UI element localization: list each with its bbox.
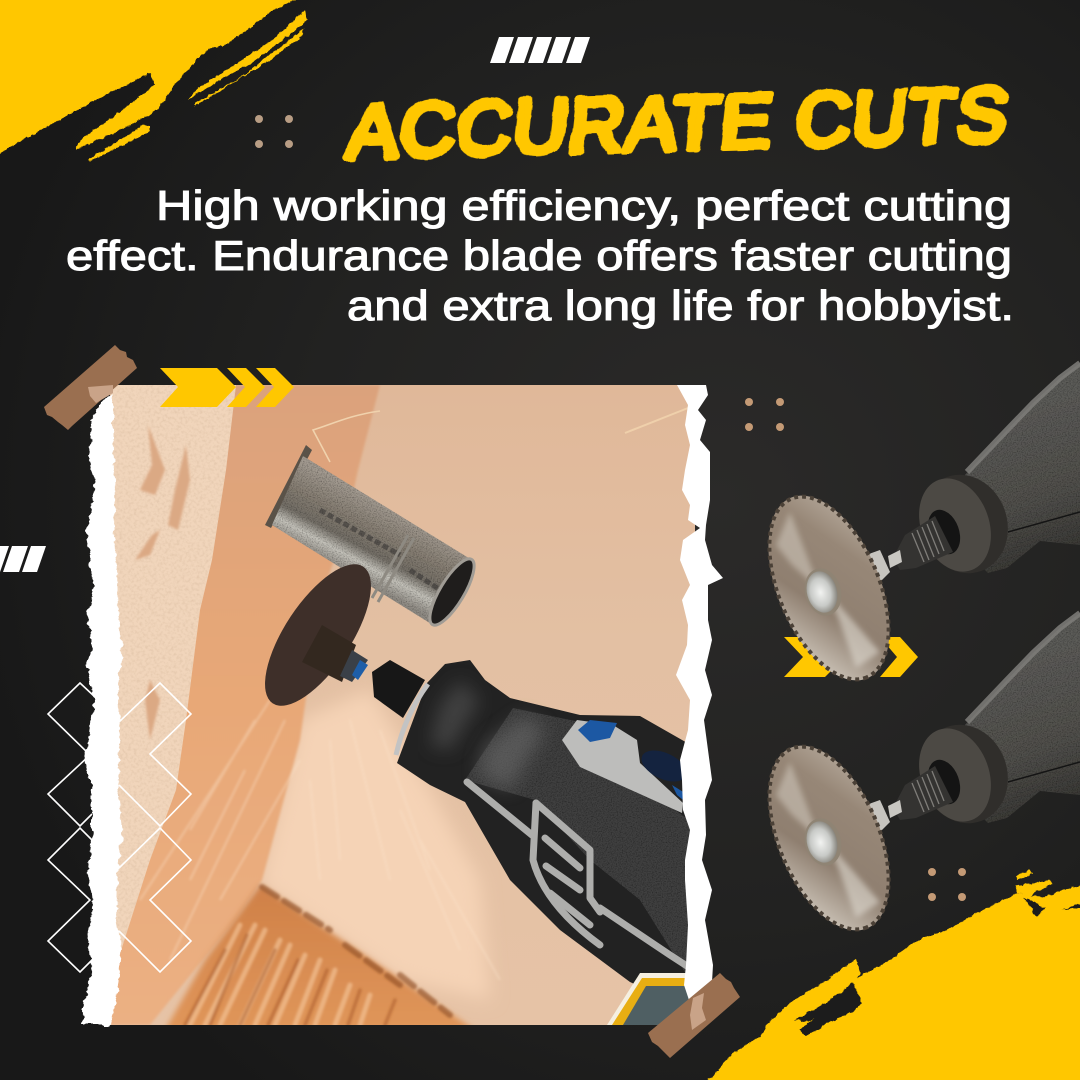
icon: cutting disc xyxy=(265,564,425,718)
decorative hatch bars: left xyxy=(0,546,46,572)
wood grain streaks xyxy=(185,887,450,1025)
icon: metal pipe xyxy=(265,445,482,631)
product: rotary tool with saw blade, bottom xyxy=(744,613,1080,948)
sparks: pale region xyxy=(260,690,490,1000)
tape: top left xyxy=(44,345,137,430)
collar highlight xyxy=(430,680,480,750)
torn paper: left edge xyxy=(82,392,122,1025)
wall: plaster xyxy=(110,385,236,960)
chevron arrows: over photo xyxy=(160,368,294,407)
wood grain band xyxy=(165,885,475,1030)
wall: wood face xyxy=(110,385,380,1025)
tape: bottom right xyxy=(648,973,740,1058)
silver button plate xyxy=(562,720,683,813)
plaster cracks xyxy=(135,425,190,740)
description text: effect. Endurance blade offers faster cutting xyxy=(66,232,1012,279)
dots: top left xyxy=(255,115,293,148)
description text: and extra long life for hobbyist. xyxy=(347,282,1014,329)
dark button xyxy=(642,750,682,782)
brush stroke: top left xyxy=(0,0,310,165)
product: rotary tool with saw blade, top xyxy=(744,363,1080,698)
blue button xyxy=(578,720,617,742)
collar and lower housing xyxy=(397,660,686,984)
dots: bottom right xyxy=(928,868,966,901)
brush stroke: bottom right xyxy=(700,870,1080,1080)
description text: High working efficiency, perfect cutting xyxy=(156,182,1012,229)
silver grille xyxy=(467,782,690,968)
yellow box corner xyxy=(607,973,688,1025)
decorative hatch bars: top xyxy=(490,37,590,63)
title: ACCURATE CUTS xyxy=(343,73,1013,175)
icon: rotary tool body xyxy=(396,660,696,1012)
photo: tool cutting pipe xyxy=(110,385,706,1030)
textured grip xyxy=(465,708,696,990)
diamond zigzag outline xyxy=(48,683,191,972)
description text xyxy=(66,182,1014,329)
spark streaks xyxy=(140,700,292,960)
grip highlight xyxy=(478,715,545,790)
chevron arrows: behind blade xyxy=(784,637,918,677)
dots: right xyxy=(745,398,784,431)
wood scratch xyxy=(313,411,380,462)
wall: beige xyxy=(110,385,706,1025)
torn paper: right edge xyxy=(676,385,723,1003)
